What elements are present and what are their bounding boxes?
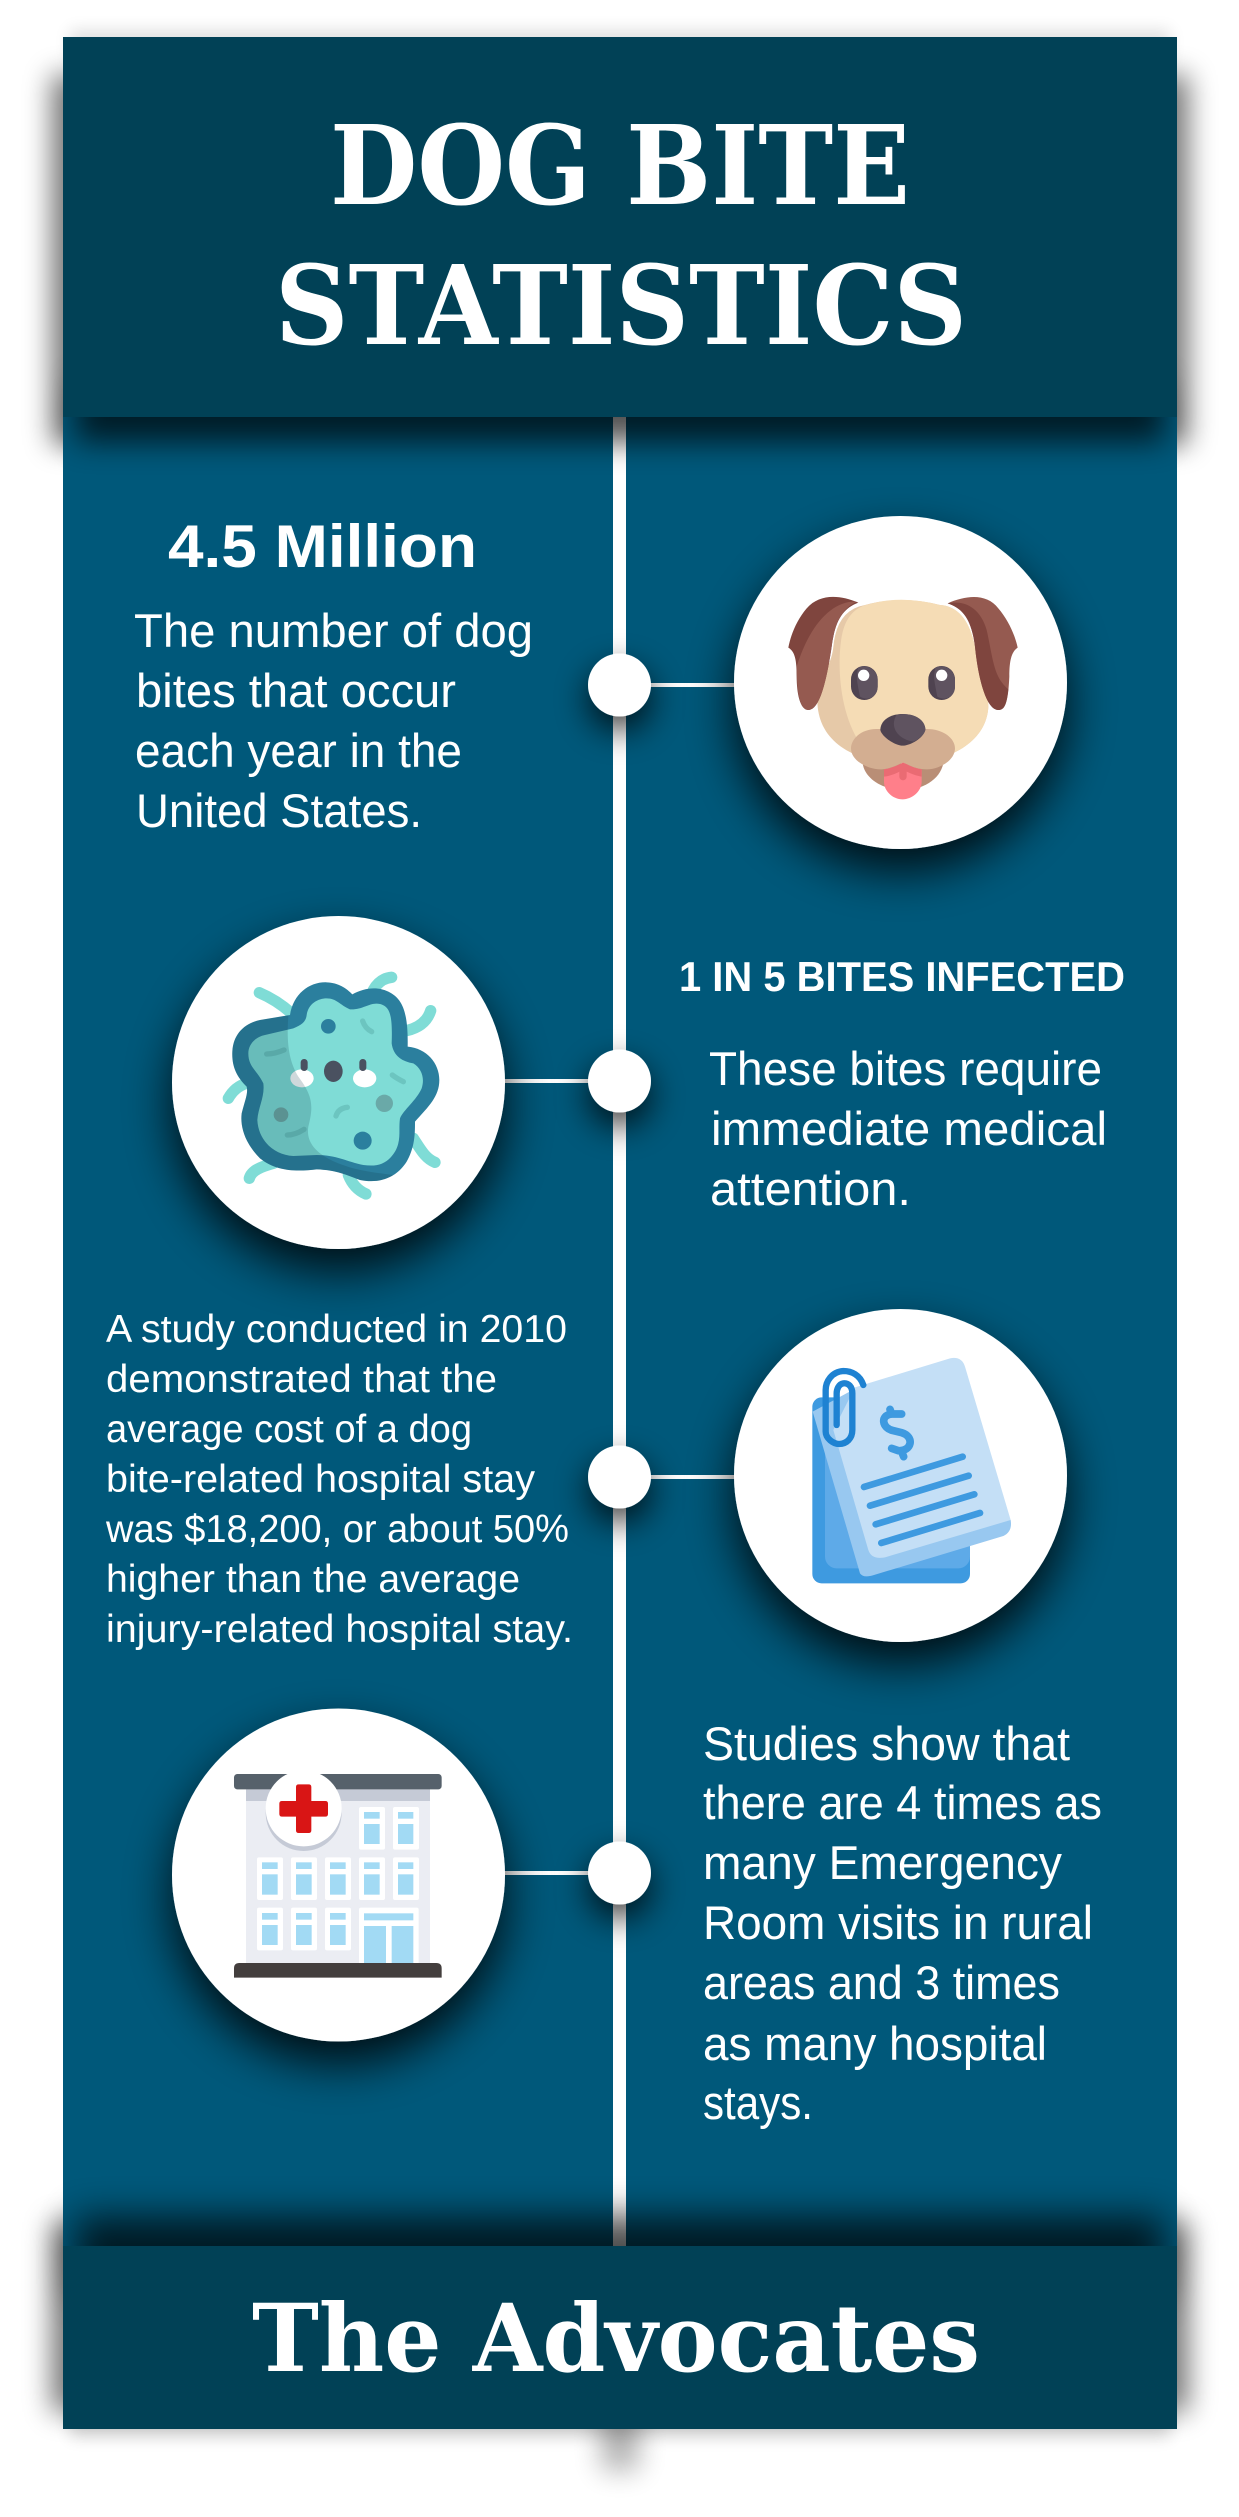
icon circle: medical bill [734,1309,1067,1642]
stat description: bites that occur [136,664,456,717]
stat description: United States. [136,784,422,837]
stat description: average cost of a dog [106,1408,472,1451]
stat description: was $18,200, or about 50% [105,1508,569,1551]
panel: infected bites stat [172,916,1125,1249]
stat description: each year in the [135,724,462,777]
stat description: These bites require [709,1042,1102,1095]
title: DOG BITE [330,101,910,230]
stat description: stays. [703,2076,813,2129]
header and footer inner cast shadows [76,380,1164,2296]
stat description [709,1042,1107,1215]
stat description: as many hospital [703,2017,1047,2070]
icon circle: hospital [172,1708,505,2042]
stat description: The number of dog [134,604,533,657]
timeline vertical line [613,400,626,2260]
connector lines [500,683,740,1875]
stat description: Room visits in rural [703,1896,1093,1949]
stat description [134,604,533,837]
icon circle: dog [734,516,1067,849]
stat description: higher than the average [106,1558,520,1601]
stat description: A study conducted in 2010 [106,1308,567,1351]
stat description [703,1717,1102,2129]
stat heading: 4.5 Million: 4.5 Million [168,513,477,580]
stat description: injury-related hospital stay. [106,1608,573,1651]
stat description: there are 4 times as [703,1776,1102,1829]
stat heading: 1 in 5 bites infected: 1 IN 5 BITES INFECTED [679,953,1125,1000]
stat description: bite-related hospital stay [106,1458,535,1501]
panel: hospital cost stat [105,1308,1067,1651]
panel: main body background [63,380,1177,2280]
panel: rural ER visits stat [172,1708,1102,2129]
stat description: Studies show that [703,1717,1070,1770]
header banner [63,37,1177,417]
icon circle: bacteria [172,916,505,1249]
brand name: The Advocates: The Advocates [252,2284,980,2394]
footer banner [63,2246,1177,2429]
title: STATISTICS [275,241,967,370]
stat description: many Emergency [703,1836,1062,1889]
stat description: demonstrated that the [106,1358,497,1401]
stat description: attention. [710,1162,911,1215]
stat description: areas and 3 times [703,1956,1060,2009]
stat description: immediate medical [711,1102,1107,1155]
panel: dog bites stat [134,513,1067,849]
timeline node dots [588,654,651,1904]
title [275,101,967,370]
stat description [105,1308,573,1651]
